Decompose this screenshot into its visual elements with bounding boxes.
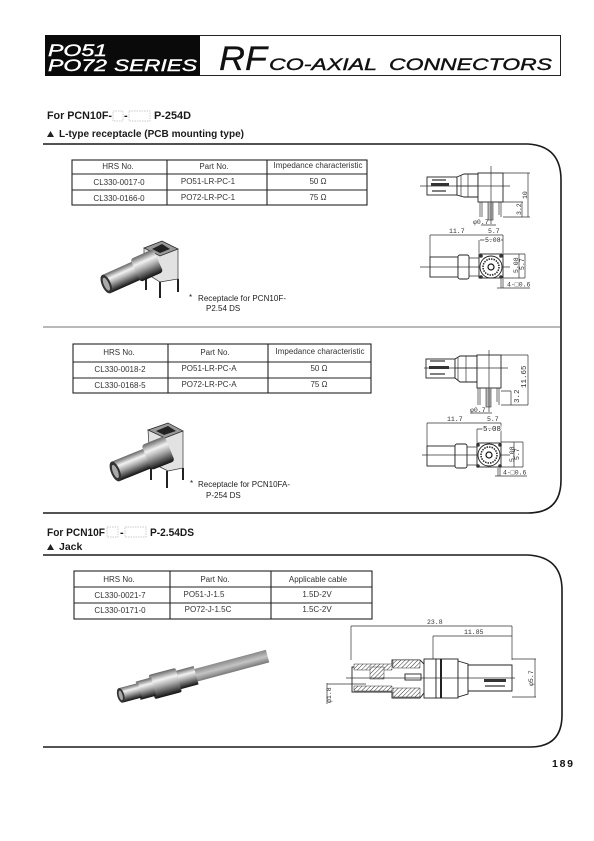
table: receptacle PC-1: CL330-0017-0	[93, 178, 145, 187]
table: receptacle PC-1: HRS No.	[102, 162, 134, 171]
table: receptacle PC-A: HRS No.	[103, 348, 135, 357]
title banner	[45, 35, 560, 78]
table: receptacle PC-1: CL330-0166-0	[93, 194, 145, 203]
drawing: front view PC-A: 5.08	[509, 446, 516, 462]
table: jack	[74, 571, 372, 619]
heading: PCN10F P-2.54DS: P-2.54DS	[150, 527, 194, 539]
heading: PCN10F P-254D	[47, 110, 191, 122]
subheading: Jack	[47, 541, 83, 553]
table: receptacle PC-1: Part No.	[199, 162, 229, 171]
table: receptacle PC-1: 75 Ω	[309, 193, 327, 202]
drawing: side view PC-1: φ0.7	[473, 219, 489, 226]
title banner: RF	[219, 40, 269, 78]
table: receptacle PC-A: Impedance characteristic	[276, 347, 364, 356]
table: receptacle PC-1: Impedance characteristic	[274, 161, 362, 170]
table: receptacle PC-A: 75 Ω	[310, 380, 328, 389]
note: receptacle for PCN10F: P2.54 DS	[206, 304, 240, 313]
photo: receptacle PC-A	[106, 423, 183, 488]
table: receptacle PC-A: CL330-0018-2	[94, 365, 146, 374]
panel frame: jack	[43, 555, 562, 747]
table: receptacle PC-1: 50 Ω	[309, 177, 327, 186]
title banner: CONNECTORS	[389, 55, 553, 74]
drawing: side view PC-1: 3.2	[516, 203, 523, 215]
table: jack: 1.5C-2V	[302, 605, 332, 614]
note: receptacle for PCN10FA: P-254 DS	[206, 491, 241, 500]
table: receptacle PC-1	[72, 160, 367, 205]
heading: PCN10F P-254D: For PCN10F-	[47, 110, 112, 122]
drawing: side view PC-A	[424, 350, 529, 414]
subheading: Jack: Jack	[59, 541, 83, 553]
drawing: front view PC-1: 5.08	[513, 257, 520, 273]
heading: PCN10F P-254D: -	[124, 110, 128, 122]
note: receptacle for PCN10F: *	[189, 293, 192, 302]
heading: PCN10F P-2.54DS: For PCN10F	[47, 527, 105, 539]
table: jack: PO72-J-1.5C	[185, 605, 232, 614]
drawing: front view PC-1: 5.7	[519, 258, 526, 270]
drawing: side view PC-1: 10	[522, 191, 529, 199]
heading: PCN10F P-254D: P-254D	[154, 110, 191, 122]
drawing: jack cross-section	[326, 619, 536, 704]
panel frame: L-type receptacles	[43, 144, 561, 513]
title banner: CO-AXIAL	[269, 55, 377, 74]
table: jack: Part No.	[200, 575, 230, 584]
heading: PCN10F P-2.54DS	[47, 527, 194, 539]
drawing: front view PC-1: 11.7	[449, 228, 465, 235]
drawing: front view PC-1	[420, 228, 531, 288]
note: receptacle for PCN10F	[189, 293, 286, 313]
table: receptacle PC-A: PO51-LR-PC-A	[181, 364, 237, 373]
table: jack: CL330-0021-7	[94, 591, 146, 600]
note: receptacle for PCN10FA: *	[190, 479, 193, 488]
subheading: L-type receptacle: L-type receptacle (PCB mounting type)	[59, 128, 244, 140]
table: receptacle PC-A	[73, 344, 371, 393]
table: jack: HRS No.	[103, 575, 135, 584]
drawing: jack cross-section: 23.8	[427, 619, 443, 626]
table: receptacle PC-1: PO51-LR-PC-1	[181, 177, 236, 186]
drawing: jack cross-section: φ5.7	[528, 670, 535, 686]
divider between receptacles	[43, 326, 561, 328]
table: receptacle PC-A: PO72-LR-PC-A	[181, 380, 237, 389]
drawing: side view PC-1	[420, 166, 530, 226]
drawing: jack cross-section: 11.85	[464, 629, 484, 636]
title banner: PO51	[48, 41, 107, 60]
heading: PCN10F P-2.54DS: -	[120, 527, 124, 539]
note: receptacle for PCN10F: Receptacle for PCN10F-	[198, 294, 286, 303]
table: receptacle PC-A: 50 Ω	[310, 364, 328, 373]
drawing: front view PC-1: 5.08	[485, 237, 501, 244]
table: jack: 1.5D-2V	[302, 590, 332, 599]
drawing: front view PC-A: 5.08	[483, 426, 501, 434]
drawing: side view PC-A: 11.65	[521, 365, 529, 388]
table: receptacle PC-A: CL330-0168-5	[94, 381, 146, 390]
drawing: front view PC-A: 5.7	[487, 416, 499, 423]
table: receptacle PC-1: PO72-LR-PC-1	[181, 193, 236, 202]
photo: receptacle PC-1	[97, 241, 178, 298]
title banner: SERIES	[114, 56, 198, 75]
drawing: side view PC-A: 3.2	[514, 389, 522, 403]
table: receptacle PC-A: Part No.	[200, 348, 230, 357]
drawing: front view PC-A	[422, 416, 527, 476]
table: jack: PO51-J-1.5	[184, 590, 225, 599]
table: jack: CL330-0171-0	[94, 606, 146, 615]
page number: 189	[552, 758, 573, 770]
photo: jack connector with cable	[114, 644, 271, 708]
drawing: jack cross-section: φ1.8	[326, 687, 333, 703]
drawing: front view PC-A: 11.7	[447, 416, 463, 423]
drawing: front view PC-1: 4-□0.6	[507, 282, 531, 288]
table: jack: Applicable cable	[289, 575, 348, 584]
title banner: PO72	[48, 56, 108, 75]
drawing: front view PC-A: 5.7	[514, 448, 521, 460]
drawing: side view PC-A: φ0.7	[470, 407, 486, 414]
drawing: front view PC-A: 4-□0.6	[503, 470, 527, 476]
note: receptacle for PCN10FA: Receptacle for PCN10FA-	[198, 480, 290, 489]
note: receptacle for PCN10FA	[190, 479, 290, 500]
drawing: front view PC-1: 5.7	[488, 228, 500, 235]
